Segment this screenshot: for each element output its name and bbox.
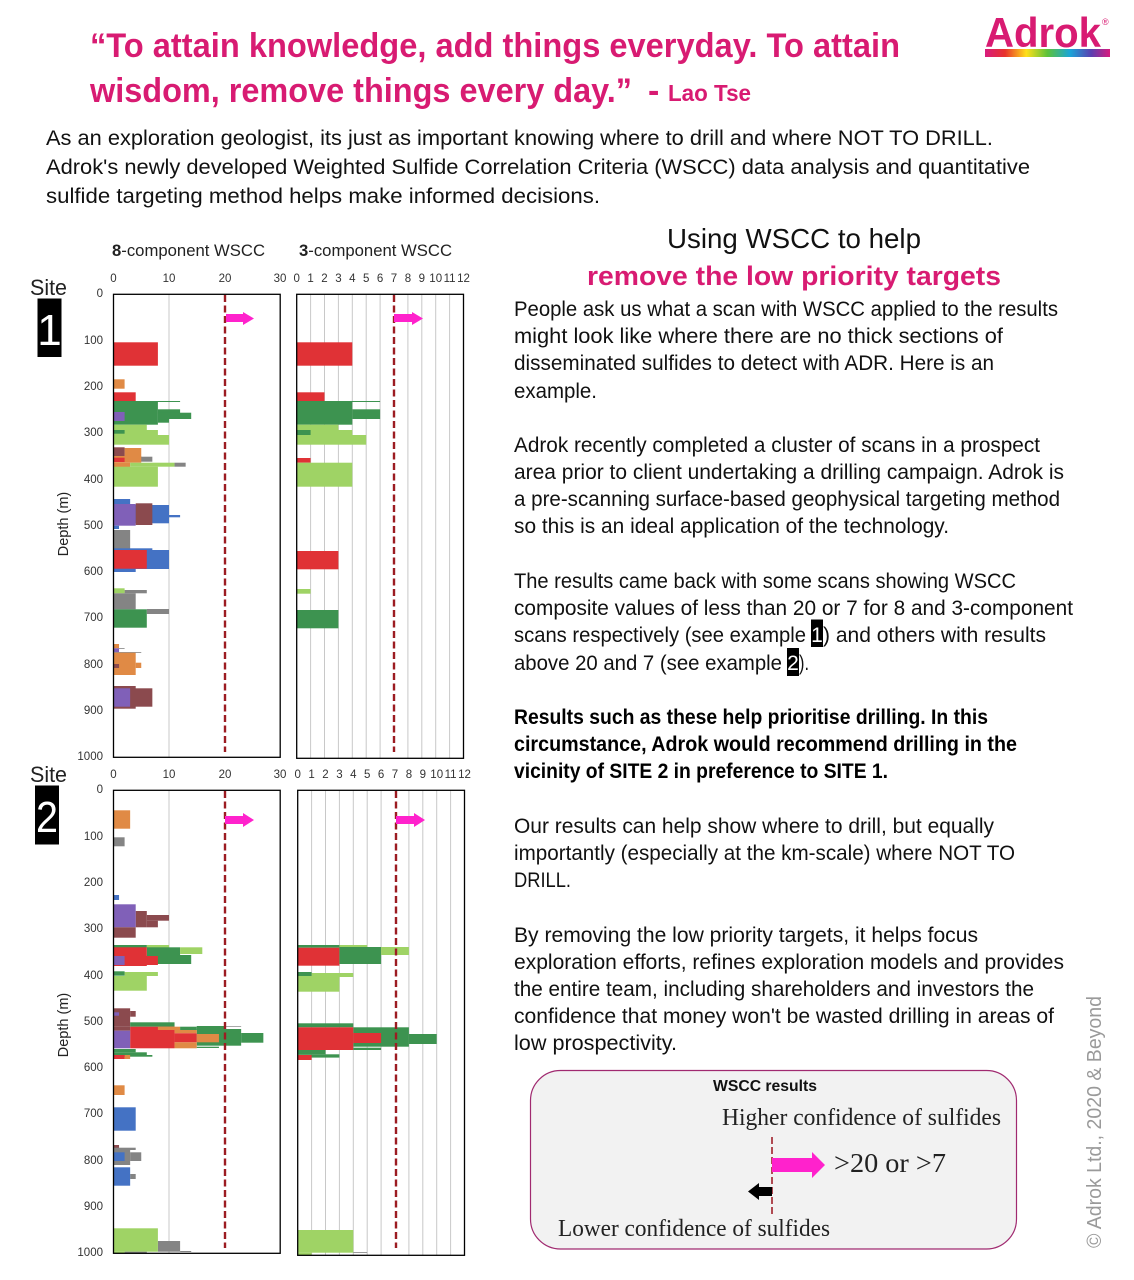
chart: site 2, 8-component <box>56 769 286 1259</box>
body text: paragraph 5: Our results can help show where to drill, but equally <box>514 815 994 838</box>
chart: site 2, 8-component: 20 <box>219 769 231 781</box>
chart: site 1, 3-component <box>293 273 470 758</box>
body text: paragraph 6 <box>514 924 1064 1055</box>
site 2 label: Site <box>30 762 67 787</box>
chart: site 1, 8-component: Depth (m) <box>56 492 72 556</box>
chart: site 2, 8-component: 30 <box>274 769 286 781</box>
chart: site 2, 3-component: 4 <box>350 769 357 781</box>
chart: site 2, 3-component: 9 <box>420 769 426 781</box>
body text: paragraph 2: area prior to client undertaking a drilling campaign. Adrok is <box>514 461 1064 484</box>
legend: WSCC results: Lower confidence of sulfides <box>558 1216 830 1242</box>
chart: site 1, 8-component: 1000 <box>77 751 103 763</box>
body text: paragraph 1: example. <box>514 380 597 403</box>
chart: site 1, 8-component: 10 <box>163 273 175 285</box>
body text: paragraph 2 <box>514 434 1064 538</box>
chart: site 2, 8-component: 200 <box>84 877 103 889</box>
chart: site 1, 3-component: 12 <box>457 273 470 285</box>
intro text: sulfide targeting method helps make informed decisions. <box>46 185 600 208</box>
body text: paragraph 3: 1 <box>811 624 823 647</box>
chart: site 2, 3-component: 0 <box>294 769 301 781</box>
chart: site 2, 3-component: 6 <box>378 769 384 781</box>
copyright: © Adrok Ltd., 2020 & Beyond <box>1084 996 1106 1248</box>
chart headings: 3-component WSCC <box>299 241 452 260</box>
body text: bold recommendation: circumstance, Adrok would recommend drilling in the <box>514 733 1017 756</box>
body text: paragraph 2: a pre-scanning surface-based geophysical targeting method <box>514 488 1060 511</box>
legend: WSCC results <box>530 1070 1016 1249</box>
body text: paragraph 3: ) and others with results <box>823 624 1046 647</box>
chart: site 2, 8-component: 0 <box>97 784 103 796</box>
chart: site 2, 8-component: 1000 <box>77 1247 103 1259</box>
body text: paragraph 1: disseminated sulfides to detect with ADR. Here is an <box>514 352 994 375</box>
body text: paragraph 1 <box>514 298 1058 403</box>
chart: site 1, 8-component: 0 <box>97 288 103 300</box>
chart: site 2, 3-component: 12 <box>458 769 471 781</box>
chart: site 1, 3-component: 2 <box>321 273 328 285</box>
heading: using WSCC: Using WSCC to help <box>667 223 921 254</box>
chart: site 1, 8-component: 500 <box>84 520 103 532</box>
body text: paragraph 3: The results came back with some scans showing WSCC <box>514 570 1016 593</box>
body text: bold recommendation: vicinity of SITE 2 in preference to SITE 1. <box>514 760 888 783</box>
title: Lao Tse quote: “To attain knowledge, add things everyday. To attain <box>90 27 900 65</box>
body text: paragraph 6: confidence that money won't be wasted drilling in areas of <box>514 1005 1054 1028</box>
chart: site 1, 3-component: 11 <box>444 273 456 285</box>
chart: site 1, 8-component: 300 <box>84 427 103 439</box>
chart: site 2, 8-component: 500 <box>84 1016 103 1028</box>
chart: site 1, 3-component: 5 <box>363 273 369 285</box>
chart: site 2, 8-component: 600 <box>84 1062 103 1074</box>
chart: site 1, 8-component: 700 <box>84 612 103 624</box>
chart: site 1, 3-component: 6 <box>377 273 383 285</box>
legend: WSCC results: >20 or >7 <box>834 1148 946 1178</box>
body text: paragraph 3 <box>514 570 1073 676</box>
chart headings <box>112 241 452 260</box>
chart: site 2, 8-component: 10 <box>163 769 175 781</box>
chart: site 2, 8-component: 0 <box>110 769 117 781</box>
chart: site 2, 8-component: Depth (m) <box>56 993 72 1057</box>
chart: site 2, 8-component: 300 <box>84 923 103 935</box>
site 1 label: Site <box>30 275 67 300</box>
chart: site 2, 3-component: 10 <box>430 769 443 781</box>
chart: site 2, 3-component: 8 <box>406 769 412 781</box>
chart: site 1, 3-component: 0 <box>293 273 300 285</box>
legend: WSCC results: Higher confidence of sulfides <box>722 1105 1001 1131</box>
chart: site 1, 3-component: 8 <box>405 273 411 285</box>
body text: bold recommendation: Results such as these help prioritise drilling. In this <box>514 706 988 729</box>
chart: site 2, 3-component: 11 <box>445 769 457 781</box>
body text: paragraph 5: DRILL. <box>514 869 571 892</box>
legend: WSCC results: WSCC results <box>713 1078 817 1095</box>
body text: paragraph 6: low prospectivity. <box>514 1032 677 1055</box>
chart: site 1, 8-component <box>56 273 286 763</box>
chart: site 2, 8-component: 100 <box>84 831 103 843</box>
intro text: Adrok's newly developed Weighted Sulfide Correlation Criteria (WSCC) data analysis and quantitative <box>46 156 1030 179</box>
chart: site 2, 3-component: 3 <box>336 769 343 781</box>
body text: paragraph 6: the entire team, including shareholders and investors the <box>514 978 1034 1001</box>
body text: paragraph 1: People ask us what a scan with WSCC applied to the results <box>514 298 1058 321</box>
body text: paragraph 3: scans respectively (see example <box>514 624 806 647</box>
intro text <box>46 127 1030 208</box>
chart: site 2, 3-component: 2 <box>322 769 329 781</box>
body text: paragraph 1: might look like where there are no thick sections of <box>514 325 1003 348</box>
chart: site 1, 8-component: 100 <box>84 335 103 347</box>
body text: paragraph 3: above 20 and 7 (see example <box>514 652 782 675</box>
title: Lao Tse quote: - <box>648 72 659 110</box>
chart: site 2, 3-component: 7 <box>392 769 398 781</box>
body text: bold recommendation <box>514 706 1017 783</box>
body text: paragraph 5: importantly (especially at the km-scale) where NOT TO <box>514 842 1015 865</box>
chart: site 2, 8-component: 800 <box>84 1155 103 1167</box>
chart: site 2, 3-component <box>294 769 471 1256</box>
title: Lao Tse quote: wisdom, remove things every day.” <box>89 72 632 110</box>
chart: site 1, 8-component: 0 <box>110 273 117 285</box>
chart: site 2, 8-component: 900 <box>84 1201 103 1213</box>
body text: paragraph 3: composite values of less than 20 or 7 for 8 and 3-component <box>514 597 1073 620</box>
chart: site 1, 8-component: 600 <box>84 566 103 578</box>
heading: using WSCC: remove the low priority targets <box>587 261 1001 291</box>
logo: Adrok: ® <box>1102 17 1109 27</box>
chart: site 1, 3-component: 9 <box>419 273 425 285</box>
body text: paragraph 6: By removing the low priority targets, it helps focus <box>514 924 978 947</box>
body text: paragraph 3: 2 <box>787 652 799 675</box>
chart: site 2, 8-component: 700 <box>84 1108 103 1120</box>
chart: site 1, 8-component: 20 <box>219 273 231 285</box>
chart: site 1, 8-component: 30 <box>274 273 286 285</box>
body text: paragraph 2: Adrok recently completed a cluster of scans in a prospect <box>514 434 1040 457</box>
title: Lao Tse quote: Lao Tse <box>668 80 751 106</box>
chart: site 1, 8-component: 400 <box>84 474 103 486</box>
site 1 label: 1 <box>37 306 62 355</box>
title: Lao Tse quote <box>89 27 900 110</box>
chart: site 1, 3-component: 3 <box>335 273 342 285</box>
chart: site 1, 8-component: 900 <box>84 705 103 717</box>
chart: site 1, 3-component: 10 <box>429 273 442 285</box>
chart: site 2, 8-component: 400 <box>84 970 103 982</box>
chart: site 1, 8-component: 800 <box>84 659 103 671</box>
chart: site 1, 3-component: 1 <box>307 273 314 285</box>
chart: site 2, 3-component: 1 <box>308 769 315 781</box>
site 1 label <box>30 275 67 357</box>
logo: Adrok: Adrok <box>985 9 1102 56</box>
body text: paragraph 2: so this is an ideal application of the technology. <box>514 515 949 538</box>
site 2 label <box>30 762 67 844</box>
site 2 label: 2 <box>36 793 58 842</box>
body text: paragraph 3: ). <box>799 652 809 675</box>
body text: paragraph 5 <box>514 815 1015 892</box>
heading: using WSCC <box>587 223 1001 291</box>
chart headings: 8-component WSCC <box>112 241 265 260</box>
chart: site 1, 3-component: 4 <box>349 273 356 285</box>
chart: site 1, 8-component: 200 <box>84 381 103 393</box>
intro text: As an exploration geologist, its just as important knowing where to drill and where NOT TO DRILL. <box>46 127 993 150</box>
chart: site 1, 3-component: 7 <box>391 273 397 285</box>
body text: paragraph 6: exploration efforts, refines exploration models and provides <box>514 951 1064 974</box>
chart: site 2, 3-component: 5 <box>364 769 370 781</box>
